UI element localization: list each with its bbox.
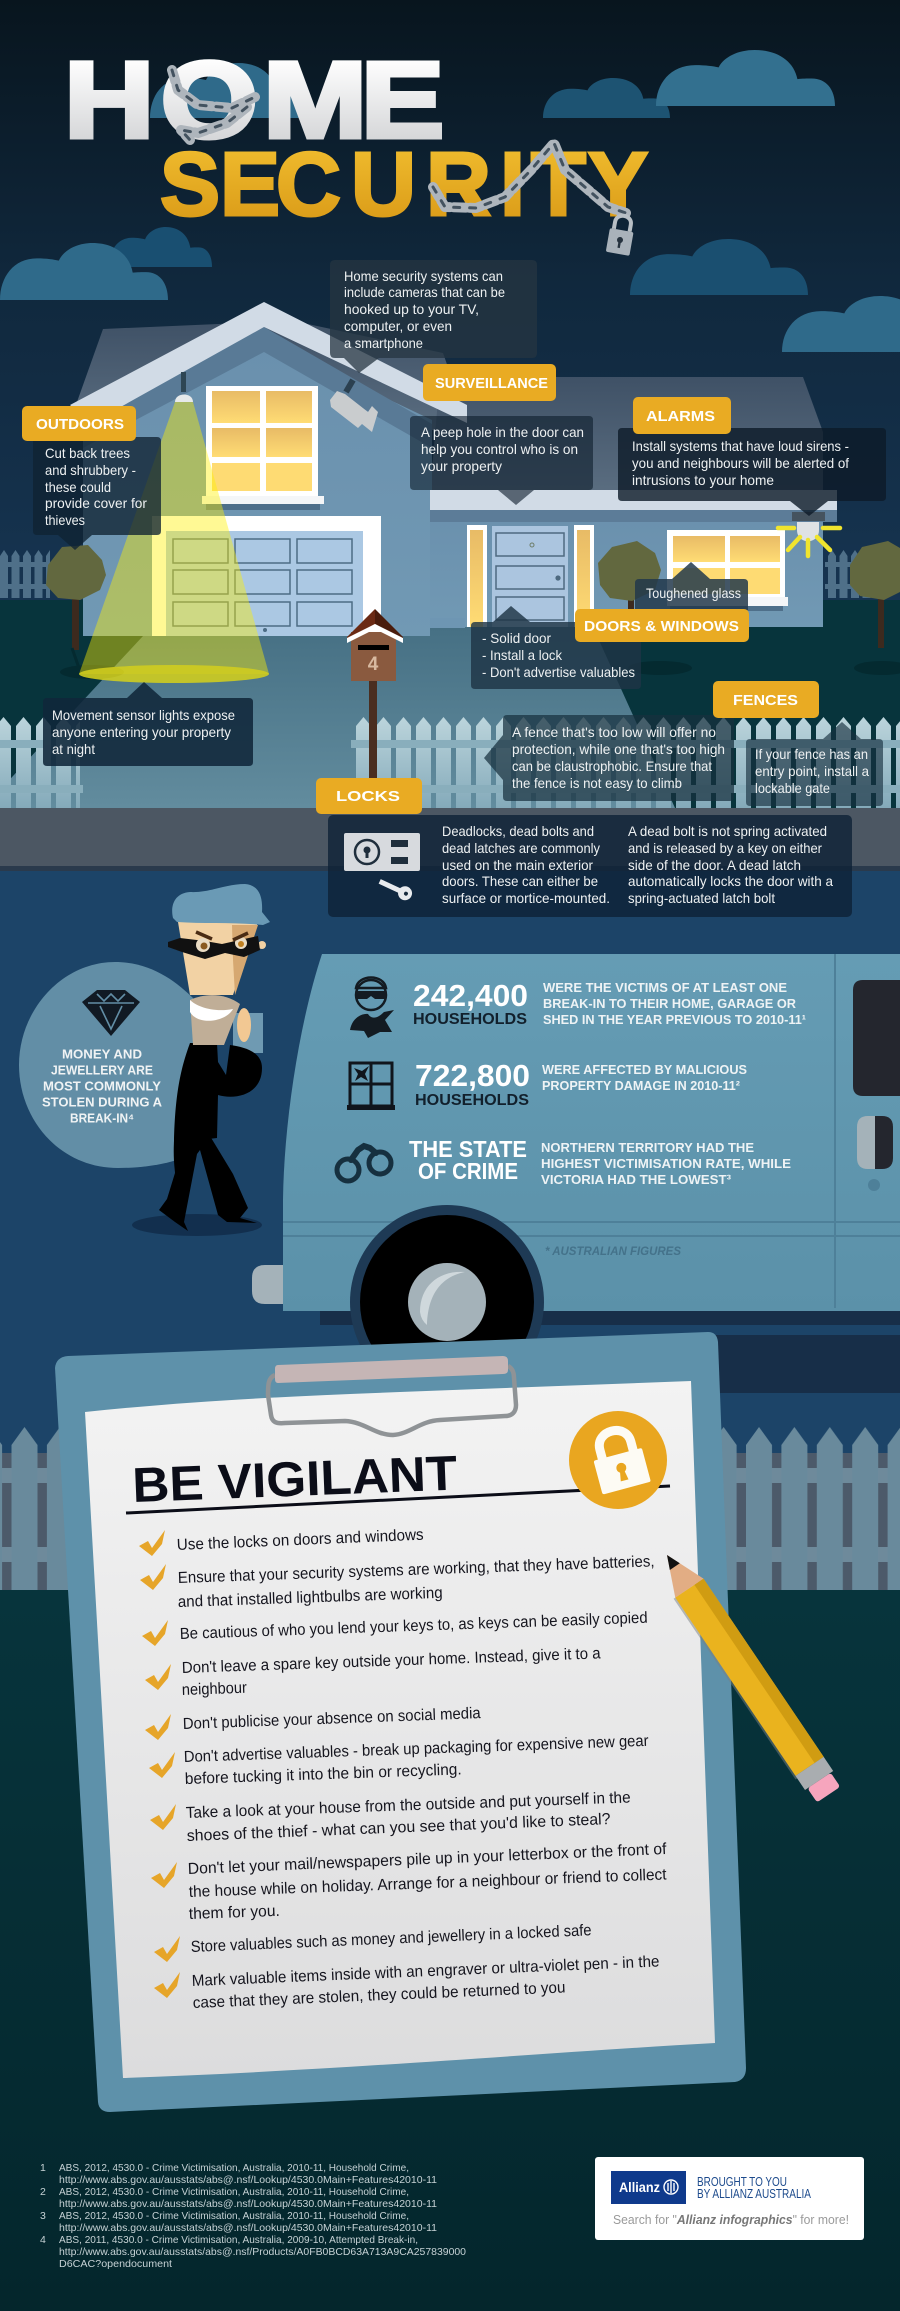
front door bbox=[492, 526, 568, 627]
footnotes: 1 bbox=[40, 2162, 46, 2174]
sack text bbox=[42, 1048, 162, 1126]
locks text column one: surface or mortice-mounted. bbox=[442, 890, 610, 906]
checklist text: Store valuables such as money and jewellery in a locked safe bbox=[190, 1922, 592, 1956]
stat 722,800: PROPERTY DAMAGE IN 2010-11² bbox=[542, 1078, 741, 1093]
footnotes: 2 bbox=[40, 2186, 46, 2198]
label: outdoors bbox=[22, 406, 136, 441]
heading: be vigilant: BE VIGILANT bbox=[131, 1447, 458, 1513]
locks text column one: used on the main exterior bbox=[442, 857, 593, 873]
house wall right of lawn covers bbox=[430, 618, 465, 628]
stat state of crime: HIGHEST VICTIMISATION RATE, WHILE bbox=[541, 1156, 791, 1171]
title bbox=[64, 40, 648, 235]
upper window bbox=[202, 386, 324, 510]
wall left section bbox=[83, 340, 432, 636]
stat 242,400: WERE THE VICTIMS OF AT LEAST ONE bbox=[543, 980, 787, 995]
stat 242,400: HOUSEHOLDS bbox=[413, 1011, 527, 1028]
callout: alarms: Install systems that have loud sirens - bbox=[632, 438, 849, 454]
paper bbox=[85, 1381, 715, 2078]
note: australian figures: * AUSTRALIAN FIGURES bbox=[545, 1244, 681, 1258]
clipboard clip bar bbox=[275, 1356, 508, 1383]
panel: locks bbox=[328, 815, 852, 917]
icon: chain around O bbox=[172, 70, 255, 140]
background: ground bbox=[0, 1590, 900, 2311]
thief mask bbox=[168, 936, 260, 959]
icon: lock plate bbox=[344, 833, 420, 871]
stat 242,400: 242,400 bbox=[413, 978, 528, 1013]
footnotes: ABS, 2011, 4530.0 - Crime Victimisation, Australia, 2009-10, Attempted Break-in, bbox=[59, 2234, 418, 2246]
ground behind the house bbox=[0, 600, 900, 810]
callout: fence height: protection, while one that's too high bbox=[512, 741, 725, 757]
road bbox=[0, 808, 900, 871]
callout: toughened glass bbox=[635, 562, 748, 610]
icon: burglar bbox=[350, 978, 394, 1038]
checklist text: Take a look at your house from the outside and put yourself in the bbox=[186, 1789, 631, 1822]
checklist text: Be cautious of who you lend your keys to, as keys can be easily copied bbox=[180, 1610, 648, 1643]
thief cap bbox=[172, 884, 270, 925]
allianz credit: BROUGHT TO YOU bbox=[697, 2174, 787, 2189]
background: street below road bbox=[0, 810, 900, 1600]
label: doors and windows bbox=[575, 609, 749, 642]
van bbox=[252, 954, 900, 1399]
callout: movement sensor lights bbox=[43, 682, 253, 766]
thief beard and scarf bbox=[190, 995, 240, 1045]
label: locks bbox=[316, 778, 422, 814]
icon: handcuffs bbox=[337, 1146, 391, 1181]
callout: surveillance cameras bbox=[330, 260, 537, 373]
cloud left small bbox=[109, 227, 212, 267]
callout: surveillance cameras: hooked up to your TV, bbox=[344, 301, 479, 317]
thief legs bbox=[159, 1136, 257, 1231]
callout: doors list: - Solid door bbox=[482, 630, 551, 646]
sensor light beam bbox=[79, 402, 269, 683]
label: alarms bbox=[633, 397, 731, 434]
allianz credit bbox=[697, 2174, 811, 2201]
stat 722,800: WERE AFFECTED BY MALICIOUS bbox=[542, 1062, 747, 1077]
footnotes: ABS, 2012, 4530.0 - Crime Victimisation, Australia, 2010-11, Household Crime, bbox=[59, 2210, 409, 2222]
cloud top right large bbox=[656, 50, 835, 106]
stat state of crime bbox=[409, 1136, 791, 1187]
locks text column one: Deadlocks, dead bolts and bbox=[442, 823, 594, 839]
checklist text: before tucking it into the bin or recycling. bbox=[185, 1761, 462, 1788]
front lawn bbox=[0, 627, 675, 808]
checklist text: Don't let your mail/newspapers pile up in your letterbox or the front of bbox=[187, 1841, 667, 1878]
thief sack callout bbox=[19, 962, 200, 1168]
thief hand bbox=[237, 1008, 251, 1042]
callout: doors list: - Install a lock bbox=[482, 647, 563, 663]
locks text column two: and is released by a key on either bbox=[628, 840, 822, 856]
front fence left bbox=[0, 717, 83, 808]
callout: peep hole: A peep hole in the door can bbox=[421, 424, 584, 440]
sack text: MONEY AND bbox=[62, 1048, 142, 1062]
cloud top right small bbox=[543, 78, 670, 118]
checklist text: neighbour bbox=[182, 1680, 248, 1699]
door side window right bbox=[574, 525, 594, 627]
clipboard bbox=[40, 1332, 864, 2270]
locks text column two: side of the door. A dead latch bbox=[628, 857, 801, 873]
thief ears bbox=[173, 941, 266, 950]
sack text: STOLEN DURING A bbox=[42, 1096, 162, 1110]
label: doors and windows: DOORS & WINDOWS bbox=[584, 618, 739, 635]
checklist text: Mark valuable items inside with an engraver or ultra-violet pen - in the bbox=[191, 1953, 660, 1990]
tree right bbox=[850, 541, 900, 675]
footnotes: http://www.abs.gov.au/ausstats/abs@.nsf/Products/A0FB0BCD63A713A9CA257839000 bbox=[59, 2246, 466, 2258]
callout: lockable gate: lockable gate bbox=[755, 780, 830, 796]
thief face shade bbox=[232, 925, 258, 995]
thief eyes bbox=[196, 937, 247, 952]
thief character bbox=[132, 884, 270, 1236]
icon: pencil bbox=[651, 1545, 843, 1805]
thief smile bbox=[190, 1000, 233, 1021]
eave shadow bbox=[430, 508, 837, 522]
icon: broken window bbox=[347, 1063, 395, 1110]
tree middle bbox=[598, 541, 692, 675]
garage door bbox=[152, 516, 381, 636]
locks text column one bbox=[442, 823, 610, 906]
checklist text: Don't publicise your absence on social media bbox=[183, 1705, 481, 1733]
statistics bbox=[337, 978, 806, 1258]
callout: alarms: intrusions to your home bbox=[632, 472, 774, 488]
callout: surveillance cameras: computer, or even bbox=[344, 318, 452, 334]
locks text column two bbox=[628, 823, 833, 906]
background: dark road band bbox=[700, 1335, 900, 1393]
wall right section bbox=[430, 510, 823, 627]
callout: movement sensor lights: Movement sensor lights expose bbox=[52, 707, 235, 723]
stat 722,800 bbox=[415, 1058, 747, 1109]
front fence right bbox=[351, 717, 900, 808]
label: locks: LOCKS bbox=[336, 788, 400, 805]
icon: chain and padlock on SECURITY bbox=[433, 143, 636, 256]
gable white trim bbox=[70, 302, 467, 424]
locks text column one: doors. These can either be bbox=[442, 873, 598, 889]
thief shadow bbox=[132, 1214, 262, 1236]
van door handle bbox=[857, 1116, 893, 1191]
background: night sky bbox=[0, 0, 900, 810]
callout: fence height bbox=[484, 715, 734, 801]
icon: key bbox=[377, 875, 414, 903]
checklist text: Don't leave a spare key outside your home. Instead, give it to a bbox=[182, 1645, 601, 1677]
callout: peep hole: your property bbox=[421, 458, 502, 474]
callout: doors list bbox=[471, 606, 641, 689]
right window bbox=[667, 530, 788, 611]
footnotes bbox=[40, 2162, 466, 2270]
footnotes: D6CAC?opendocument bbox=[59, 2258, 172, 2270]
mailbox bbox=[347, 609, 403, 808]
callout: outdoors: thieves bbox=[45, 512, 85, 528]
callout: lockable gate: If your fence has an bbox=[755, 746, 868, 762]
van wheel bbox=[350, 1205, 544, 1399]
locks text column one: dead latches are commonly bbox=[442, 840, 600, 856]
check marks bbox=[139, 1530, 180, 1998]
back fence left bbox=[0, 550, 50, 598]
checklist text: case that they are stolen, they could be returned to you bbox=[192, 1979, 566, 2012]
stat 722,800: 722,800 bbox=[415, 1058, 530, 1093]
callout: toughened glass: Toughened glass bbox=[646, 585, 741, 601]
door side window left bbox=[467, 525, 487, 627]
icon: diamond bbox=[82, 990, 140, 1036]
icon: alarm siren bbox=[778, 512, 840, 556]
footnotes: 4 bbox=[40, 2234, 46, 2246]
allianz logo panel bbox=[595, 2157, 864, 2240]
stat state of crime: NORTHERN TERRITORY HAD THE bbox=[541, 1140, 754, 1155]
checklist text: the house while on holiday. Arrange for a neighbour or friend to collect bbox=[189, 1866, 667, 1901]
label: outdoors: OUTDOORS bbox=[36, 416, 124, 433]
heading underline bbox=[126, 1486, 670, 1513]
roof right grey bbox=[430, 377, 823, 492]
checklist text: Ensure that your security systems are working, that they have batteries, bbox=[178, 1553, 655, 1587]
callout: movement sensor lights: at night bbox=[52, 741, 95, 757]
callout: outdoors: Cut back trees bbox=[45, 445, 130, 461]
sack text: JEWELLERY ARE bbox=[51, 1064, 153, 1078]
checklist text: Don't advertise valuables - break up packaging for expensive new gear bbox=[184, 1733, 649, 1766]
gable band bbox=[83, 327, 432, 448]
sack text: MOST COMMONLY bbox=[43, 1080, 162, 1094]
callout: fence height: can be claustrophobic. Ensure that bbox=[512, 758, 712, 774]
allianz logo bbox=[611, 2171, 686, 2204]
locks text column two: automatically locks the door with a bbox=[628, 873, 833, 889]
footnotes: http://www.abs.gov.au/ausstats/abs@.nsf/Lookup/4530.0Main+Features42010-11 bbox=[59, 2198, 437, 2210]
callout: outdoors bbox=[33, 437, 161, 550]
callout: doors list: - Don't advertise valuables bbox=[482, 664, 635, 680]
callout: outdoors: these could bbox=[45, 479, 111, 495]
stat 242,400: SHED IN THE YEAR PREVIOUS TO 2010-11¹ bbox=[543, 1012, 806, 1027]
roof left grey bbox=[67, 322, 470, 430]
checklist text: and that installed lightbulbs are working bbox=[178, 1585, 443, 1611]
clipboard wire bbox=[268, 1366, 516, 1435]
label: surveillance: SURVEILLANCE bbox=[435, 375, 548, 392]
lower fence bbox=[0, 1427, 900, 1590]
icon: porch light cord and lamp bbox=[175, 372, 193, 402]
thief stolen window pane bbox=[233, 1013, 263, 1053]
cloud behind title bbox=[150, 63, 310, 118]
label: fences bbox=[713, 681, 819, 718]
callout: movement sensor lights: anyone entering your property bbox=[52, 724, 231, 740]
stat 242,400 bbox=[413, 978, 806, 1028]
allianz search line: Search for "Allianz infographics" for more! bbox=[613, 2213, 849, 2227]
cloud left large bbox=[0, 243, 168, 300]
mailbox: 4 bbox=[368, 654, 379, 675]
label: fences: FENCES bbox=[733, 692, 798, 709]
footnotes: ABS, 2012, 4530.0 - Crime Victimisation, Australia, 2010-11, Household Crime, bbox=[59, 2162, 409, 2174]
icon: padlock badge bbox=[569, 1411, 667, 1509]
cloud right middle bbox=[630, 239, 808, 295]
callout: surveillance cameras: a smartphone bbox=[344, 335, 423, 351]
back fence right bbox=[825, 550, 885, 598]
footnotes: http://www.abs.gov.au/ausstats/abs@.nsf/Lookup/4530.0Main+Features42010-11 bbox=[59, 2222, 437, 2234]
callout: lockable gate: entry point, install a bbox=[755, 763, 869, 779]
allianz credit: BY ALLIANZ AUSTRALIA bbox=[697, 2186, 811, 2201]
icon: security camera bbox=[330, 380, 378, 432]
title word HOME: HOME bbox=[64, 40, 444, 160]
footnotes: ABS, 2012, 4530.0 - Crime Victimisation, Australia, 2010-11, Household Crime, bbox=[59, 2186, 409, 2198]
stat state of crime: THE STATE bbox=[409, 1136, 527, 1162]
callout: fence height: A fence that's too low will offer no bbox=[512, 724, 716, 740]
checklist text: them for you. bbox=[189, 1903, 280, 1923]
footnotes: 3 bbox=[40, 2210, 46, 2222]
stat 242,400: BREAK-IN TO THEIR HOME, GARAGE OR bbox=[543, 996, 797, 1011]
checklist bbox=[139, 1527, 667, 2012]
callout: alarms bbox=[618, 428, 886, 516]
checklist text bbox=[176, 1527, 667, 2012]
thief torso and arm bbox=[174, 1043, 262, 1143]
callout: peep hole: help you control who is on bbox=[421, 441, 578, 457]
sack text: BREAK-IN⁴ bbox=[70, 1112, 134, 1126]
locks text column two: spring-actuated latch bolt bbox=[628, 890, 775, 906]
dark strip under door bbox=[430, 627, 530, 635]
callout: peep hole bbox=[410, 416, 593, 505]
title word SECURITY: SECURITY bbox=[160, 135, 648, 235]
eave trim bbox=[430, 490, 837, 510]
thief face bbox=[178, 922, 258, 995]
footnotes: http://www.abs.gov.au/ausstats/abs@.nsf/Lookup/4530.0Main+Features42010-11 bbox=[59, 2174, 437, 2186]
stat state of crime: VICTORIA HAD THE LOWEST³ bbox=[541, 1172, 732, 1187]
checklist text: shoes of the thief - what can you see that you'd like to steal? bbox=[186, 1811, 611, 1845]
stat state of crime: OF CRIME bbox=[418, 1158, 518, 1184]
house bbox=[67, 302, 837, 636]
allianz logo: Allianz bbox=[619, 2179, 660, 2195]
locks text column two: A dead bolt is not spring activated bbox=[628, 823, 827, 839]
callout: surveillance cameras: Home security systems can bbox=[344, 268, 503, 284]
cloud right lower bbox=[782, 296, 900, 352]
callout: lockable gate bbox=[746, 722, 883, 806]
callout: fence height: the fence is not easy to climb bbox=[512, 775, 682, 791]
checklist text: Use the locks on doors and windows bbox=[176, 1527, 424, 1554]
callout: surveillance cameras: include cameras that can be bbox=[344, 284, 505, 300]
tree left bbox=[46, 545, 124, 679]
thief eyebrows bbox=[196, 932, 248, 940]
label: surveillance bbox=[423, 364, 556, 401]
callout: outdoors: and shrubbery - bbox=[45, 462, 136, 478]
callout: alarms: you and neighbours will be alerted of bbox=[632, 455, 849, 471]
stat 722,800: HOUSEHOLDS bbox=[415, 1092, 529, 1109]
van window bbox=[853, 980, 900, 1096]
callout: outdoors: provide cover for bbox=[45, 495, 147, 511]
label: alarms: ALARMS bbox=[646, 408, 715, 425]
